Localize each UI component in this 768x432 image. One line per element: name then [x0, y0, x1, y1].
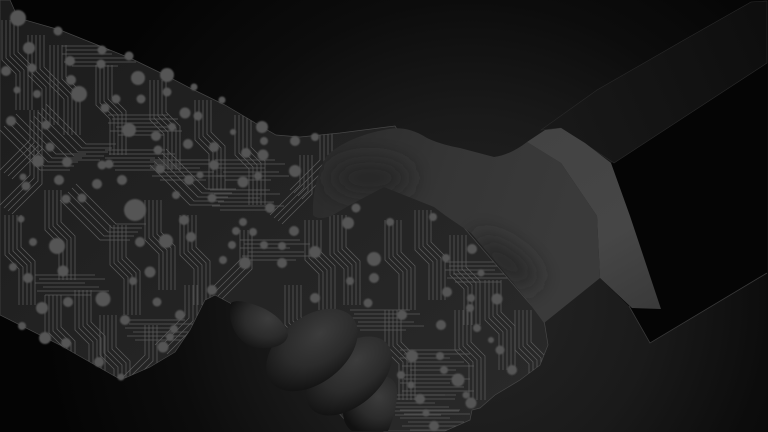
first finger: [251, 292, 373, 408]
palm silhouette: [313, 128, 600, 323]
sleeve lower edge highlight: [629, 273, 767, 343]
fingers: [230, 292, 407, 431]
palm soft shading: [368, 169, 532, 284]
shirt cuff: [527, 128, 661, 309]
jacket sleeve upper band: [541, 1, 767, 163]
arm silhouette: [0, 0, 548, 431]
jacket lower body: [561, 64, 767, 343]
circuit traces: [0, 20, 545, 430]
circuit-board robotic arm: [0, 0, 548, 431]
second finger: [291, 321, 407, 431]
third finger: [343, 376, 397, 431]
glowing nodes: [1, 10, 517, 431]
business hand palm: [313, 128, 600, 323]
thumb tip: [230, 301, 288, 348]
suit jacket sleeve: [541, 1, 767, 343]
